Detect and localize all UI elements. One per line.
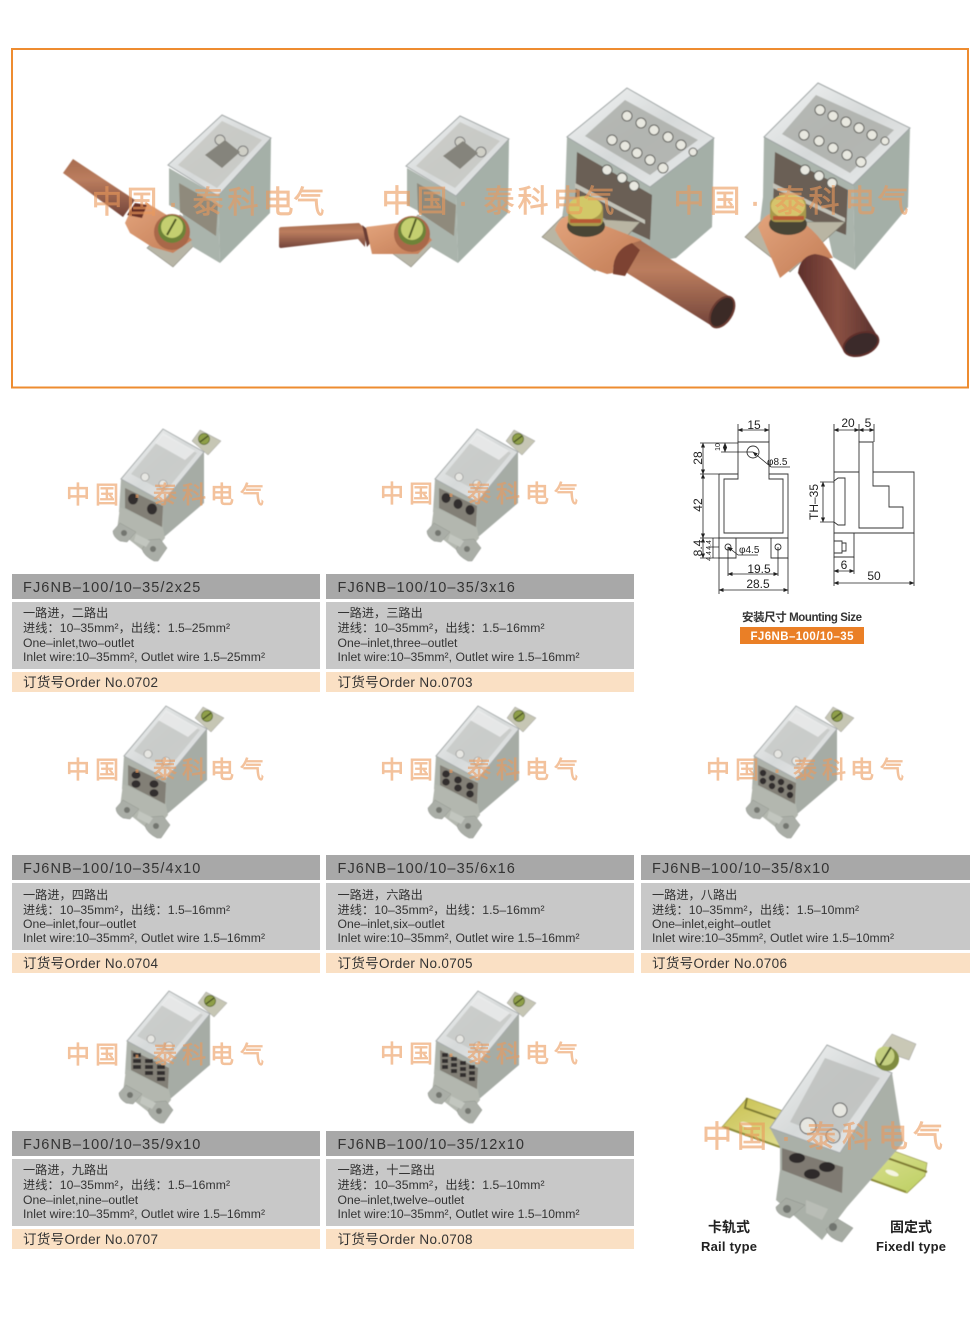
card watermarks: 气: [240, 757, 264, 784]
front view drawing: φ4.5: [739, 545, 760, 556]
diagram caption: 安装尺寸 Mounting Size: [742, 610, 862, 624]
model badge: [740, 627, 864, 644]
product card: 6x16: One–inlet,six–outlet: [338, 917, 445, 931]
card watermarks: 国: [95, 1042, 119, 1069]
front view drawing: 8.4: [691, 539, 705, 556]
product: multi-outlet connector with steep lug: [745, 83, 910, 360]
card watermarks: 国: [735, 757, 759, 784]
product card: 12x10: One–inlet,twelve–outlet: [338, 1193, 465, 1207]
hero watermarks: 泰: [192, 185, 224, 220]
product photo: 6x16: [428, 706, 536, 838]
card watermarks: 中: [380, 481, 404, 508]
product photo: 8x10: [746, 706, 854, 838]
front view drawing: 19.5: [747, 562, 771, 576]
product card: 12x10: FJ6NB–100/10–35/12x10: [338, 1137, 525, 1153]
product card: 12x10: 进线：10–35mm²，出线：1.5–10mm²: [338, 1178, 544, 1192]
hero watermarks: 国: [126, 185, 158, 220]
large photo watermark: 国: [737, 1121, 767, 1154]
product card: 8x10: 一路进，八路出: [652, 887, 737, 902]
product card: 4x10: One–inlet,four–outlet: [23, 917, 137, 931]
hero watermarks: 气: [584, 184, 614, 219]
side view drawing: 6: [841, 558, 848, 572]
side view drawing: 20: [841, 416, 855, 430]
product card: 12x10: [326, 991, 634, 1249]
card watermarks: 泰: [467, 1041, 491, 1068]
product card: 8x10: 进线：10–35mm²，出线：1.5–10mm²: [652, 903, 859, 917]
front view drawing: 10: [715, 443, 722, 451]
front view drawing: 28.5: [746, 577, 770, 591]
product: two-way connector with straight lug: [279, 116, 509, 267]
product card: 3x16: One–inlet,three–outlet: [338, 636, 458, 650]
hero watermarks: ·: [458, 184, 468, 219]
DIN rail: [722, 1098, 927, 1193]
card watermarks: 电: [525, 1041, 549, 1068]
fixed type label: 固定式: [890, 1219, 932, 1235]
hero watermarks: 电: [552, 184, 584, 219]
product card: 9x10: [12, 991, 320, 1249]
card watermarks: 电: [525, 481, 549, 508]
card watermarks: 泰: [153, 482, 177, 509]
card watermarks: ·: [133, 1042, 141, 1069]
product photo: 2x25: [113, 429, 221, 561]
card watermarks: ·: [133, 757, 141, 784]
product card: 9x10: FJ6NB–100/10–35/9x10: [23, 1137, 201, 1153]
product card: 12x10: 一路进，十二路出: [338, 1162, 435, 1177]
product photo: 9x10: [119, 991, 227, 1123]
card watermarks: 气: [240, 482, 264, 509]
product card: 8x10: FJ6NB–100/10–35/8x10: [652, 861, 830, 877]
hero watermarks: 电: [844, 184, 876, 219]
card watermarks: 科: [182, 482, 206, 509]
front view drawing: 15: [747, 418, 761, 432]
hero watermarks: 中: [382, 184, 412, 219]
card watermarks: 国: [409, 1041, 433, 1068]
card watermarks: 科: [496, 481, 520, 508]
hero watermarks: 科: [808, 184, 840, 219]
hero watermarks: 中: [92, 185, 122, 220]
product card: 6x16: [326, 706, 634, 973]
product card: 4x10: 进线：10–35mm²，出线：1.5–16mm²: [23, 903, 230, 917]
hero watermarks: 泰: [484, 184, 514, 219]
card watermarks: ·: [447, 1041, 455, 1068]
hero watermarks: 气: [878, 184, 908, 219]
card watermarks: 科: [182, 1042, 206, 1069]
card watermarks: 国: [95, 482, 119, 509]
hero watermarks: [92, 184, 908, 220]
product card: 4x10: Inlet wire:10–35mm², Outlet wire 1.5–16mm²: [23, 931, 265, 945]
front view drawing: [691, 418, 790, 594]
front view drawing: 42: [691, 498, 705, 512]
card watermarks: 泰: [467, 481, 491, 508]
large photo watermark: [702, 1121, 943, 1154]
card watermarks: 气: [554, 1041, 578, 1068]
large photo watermark: 电: [878, 1121, 908, 1154]
large photo watermark: 气: [913, 1121, 943, 1154]
model badge: FJ6NB–100/10–35: [750, 631, 854, 643]
hero watermarks: 气: [294, 185, 324, 220]
product photo: 4x10: [116, 706, 224, 838]
card watermarks: 气: [240, 1042, 264, 1069]
card watermarks: ·: [133, 482, 141, 509]
card watermarks: ·: [447, 757, 455, 784]
product card: 9x10: Inlet wire:10–35mm², Outlet wire 1.5–16mm²: [23, 1207, 265, 1221]
card watermarks: 泰: [153, 757, 177, 784]
card watermarks: 中: [380, 1041, 404, 1068]
product: two-way connector with angled lug: [63, 115, 271, 267]
hero watermarks: ·: [750, 184, 760, 219]
product card: 3x16: 订货号Order No.0703: [338, 674, 472, 690]
hero watermarks: 国: [416, 184, 448, 219]
product photo: 12x10: [428, 991, 536, 1123]
product card: 3x16: Inlet wire:10–35mm², Outlet wire 1.5–16mm²: [338, 650, 580, 664]
side view drawing: [807, 416, 914, 586]
front view drawing: φ8.5: [767, 457, 788, 468]
card watermarks: 电: [525, 757, 549, 784]
side view drawing: 50: [867, 569, 881, 583]
card watermarks: 科: [496, 1041, 520, 1068]
card watermarks: 中: [380, 757, 404, 784]
product card: 6x16: Inlet wire:10–35mm², Outlet wire 1.5–16mm²: [338, 931, 580, 945]
product card: 8x10: 订货号Order No.0706: [652, 955, 787, 971]
card watermarks: 科: [182, 757, 206, 784]
hero watermarks: 国: [710, 184, 740, 219]
rail type label: [701, 1219, 757, 1254]
product card: 4x10: FJ6NB–100/10–35/4x10: [23, 861, 201, 877]
product card: 2x25: [12, 429, 320, 692]
card watermarks: 泰: [793, 757, 817, 784]
product card: 4x10: [12, 706, 320, 973]
product card: 6x16: 进线：10–35mm²，出线：1.5–16mm²: [338, 903, 544, 917]
hero watermarks: ·: [168, 185, 178, 220]
product card: 8x10: Inlet wire:10–35mm², Outlet wire 1.5–10mm²: [652, 931, 894, 945]
card watermarks: 电: [210, 757, 234, 784]
large photo watermark: ·: [781, 1121, 791, 1154]
large photo watermark: 中: [702, 1121, 732, 1154]
product card: 8x10: One–inlet,eight–outlet: [652, 917, 771, 931]
rail type label: 卡轨式: [708, 1219, 750, 1235]
card watermarks: ·: [773, 757, 781, 784]
fixed type label: Fixedl type: [876, 1239, 946, 1254]
card watermarks: 泰: [467, 757, 491, 784]
product card: 9x10: 一路进，九路出: [23, 1162, 108, 1177]
card watermarks: 泰: [153, 1042, 177, 1069]
card watermarks: 国: [95, 757, 119, 784]
product card: 2x25: Inlet wire:10–35mm², Outlet wire 1.5–25mm²: [23, 650, 265, 664]
product card: 9x10: 进线：10–35mm²，出线：1.5–16mm²: [23, 1178, 230, 1192]
card watermarks: 气: [880, 757, 904, 784]
product card: 2x25: 一路进，二路出: [23, 605, 108, 620]
card watermarks: 电: [210, 482, 234, 509]
hero watermarks: 泰: [774, 184, 806, 219]
card watermarks: ·: [447, 481, 455, 508]
product card: 6x16: 一路进，六路出: [338, 887, 423, 902]
card watermarks: 中: [66, 1042, 90, 1069]
hero watermarks: 科: [518, 184, 548, 219]
product card: 6x16: FJ6NB–100/10–35/6x16: [338, 861, 516, 877]
hero watermarks: 科: [228, 185, 258, 220]
product card: 4x10: 订货号Order No.0704: [23, 955, 158, 971]
large photo watermark: 泰: [806, 1121, 836, 1154]
card watermarks: 科: [496, 757, 520, 784]
product card: 12x10: Inlet wire:10–35mm², Outlet wire 1.5–10mm²: [338, 1207, 580, 1221]
front view drawing: 4.4: [706, 540, 713, 550]
product card: 6x16: 订货号Order No.0705: [338, 955, 472, 971]
card watermarks: 中: [66, 757, 90, 784]
card watermarks: 电: [210, 1042, 234, 1069]
card watermarks: [66, 481, 904, 1069]
product card: 2x25: 进线：10–35mm²，出线：1.5–25mm²: [23, 621, 230, 635]
card watermarks: 气: [554, 757, 578, 784]
hero watermarks: 电: [262, 185, 294, 220]
front view drawing: 28: [691, 451, 705, 465]
card watermarks: 中: [706, 757, 730, 784]
side view drawing: TH–35: [807, 484, 821, 520]
front view drawing: 4.4: [706, 551, 713, 561]
rail type label: Rail type: [701, 1239, 757, 1254]
large photo watermark: 科: [842, 1121, 872, 1154]
card watermarks: 电: [850, 757, 874, 784]
product card: 2x25: One–inlet,two–outlet: [23, 636, 135, 650]
product card: 9x10: One–inlet,nine–outlet: [23, 1193, 139, 1207]
card watermarks: 气: [554, 481, 578, 508]
card watermarks: 国: [409, 481, 433, 508]
side view drawing: 5: [865, 416, 872, 430]
hero photos: [63, 83, 910, 360]
product card: 3x16: 一路进，三路出: [338, 605, 423, 620]
mounting size diagram: [691, 416, 914, 644]
product card: 12x10: 订货号Order No.0708: [338, 1231, 472, 1247]
hero watermarks: 中: [674, 184, 704, 219]
product card: 2x25: FJ6NB–100/10–35/2x25: [23, 580, 201, 596]
product card: 9x10: 订货号Order No.0707: [23, 1231, 158, 1247]
product photo: 3x16: [427, 429, 535, 561]
hero panel frame: [12, 49, 968, 388]
product card: 8x10: [641, 706, 970, 973]
large product photo: rail and fixed mounting: [722, 1034, 927, 1242]
product card: 2x25: 订货号Order No.0702: [23, 674, 158, 690]
card watermarks: 科: [822, 757, 846, 784]
product card: 3x16: [326, 429, 634, 692]
card watermarks: 中: [66, 482, 90, 509]
product card: 4x10: 一路进，四路出: [23, 887, 108, 902]
product card: 3x16: FJ6NB–100/10–35/3x16: [338, 580, 516, 596]
product: multi-outlet connector with lug: [542, 88, 739, 332]
product card: 3x16: 进线：10–35mm²，出线：1.5–16mm²: [338, 621, 544, 635]
fixed type label: [876, 1219, 946, 1254]
card watermarks: 国: [409, 757, 433, 784]
